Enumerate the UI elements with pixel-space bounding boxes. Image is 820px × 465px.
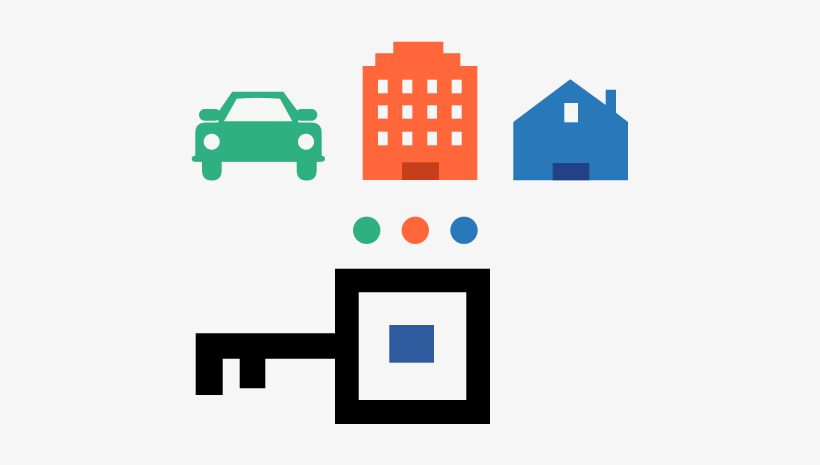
icon: key — [196, 269, 490, 424]
icon: house — [513, 79, 628, 180]
dot: blue — [450, 217, 478, 244]
dot: green — [353, 217, 380, 244]
icon: car — [192, 92, 325, 180]
dot: orange — [402, 217, 429, 244]
icon: apartment building — [363, 42, 477, 180]
